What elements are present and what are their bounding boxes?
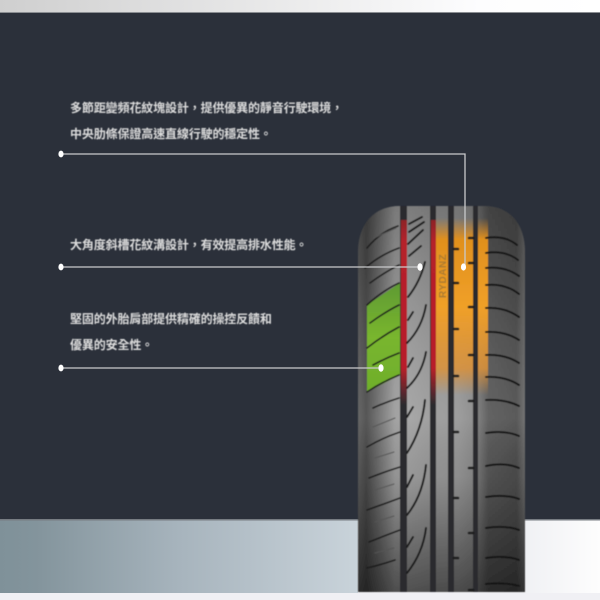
floor band <box>0 519 600 600</box>
sidewall text on tire: RYDANZ <box>438 254 449 298</box>
top light band <box>0 0 600 14</box>
tire body <box>358 206 525 592</box>
text: shoulder feature: 優異的安全性。 <box>70 338 153 352</box>
centre orange zones <box>436 218 488 395</box>
leader line 2 <box>58 263 423 271</box>
tire <box>358 206 525 592</box>
leader line 3 <box>58 364 384 372</box>
text: tread block feature: 中央肋條保證高速直線行駛的穩定性。 <box>70 127 272 141</box>
tire grooves <box>400 206 478 592</box>
text: tread block feature: 多節距變頻花紋塊設計，提供優異的靜音行駛環境， <box>70 101 343 115</box>
left shoulder green zone <box>367 283 400 392</box>
text: shoulder feature: 堅固的外胎肩部提供精確的操控反饋和 <box>70 312 272 326</box>
leader line 1 <box>58 151 466 271</box>
text: shoulder feature <box>70 312 272 352</box>
right shoulder tread lines <box>486 237 519 586</box>
tire vertical shading <box>358 206 525 592</box>
text: groove feature: 大角度斜槽花紋溝設計，有效提高排水性能。 <box>70 238 307 252</box>
red grooves <box>401 220 436 405</box>
centre rib chevrons <box>407 217 426 573</box>
rib notches <box>454 238 473 590</box>
text: tread block feature <box>70 100 343 141</box>
left shoulder fine sipes <box>373 228 396 553</box>
left shoulder tread lines <box>365 226 400 568</box>
